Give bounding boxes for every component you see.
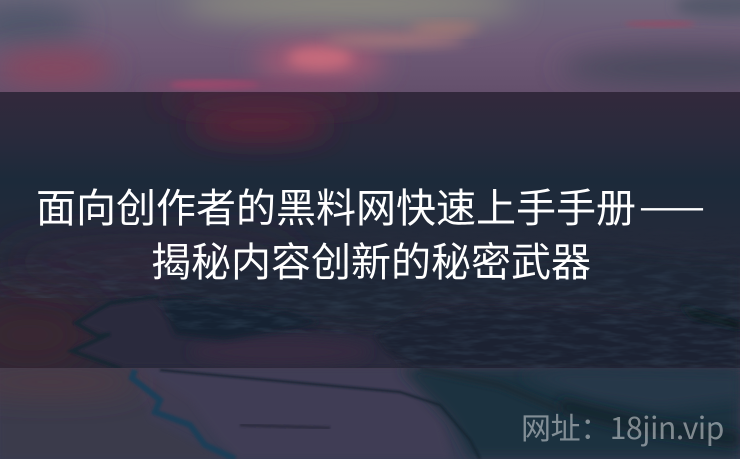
beach band: [0, 368, 740, 459]
watermark: website address: 网址：18jin.vip: [521, 404, 724, 448]
title line 2: 揭秘内容创新的秘密武器: [151, 230, 591, 288]
sky band: [0, 0, 740, 92]
title line 1: 面向创作者的黑料网快速上手手册——: [36, 176, 708, 234]
title: [36, 176, 708, 288]
sea and wet sand band: [0, 92, 740, 380]
